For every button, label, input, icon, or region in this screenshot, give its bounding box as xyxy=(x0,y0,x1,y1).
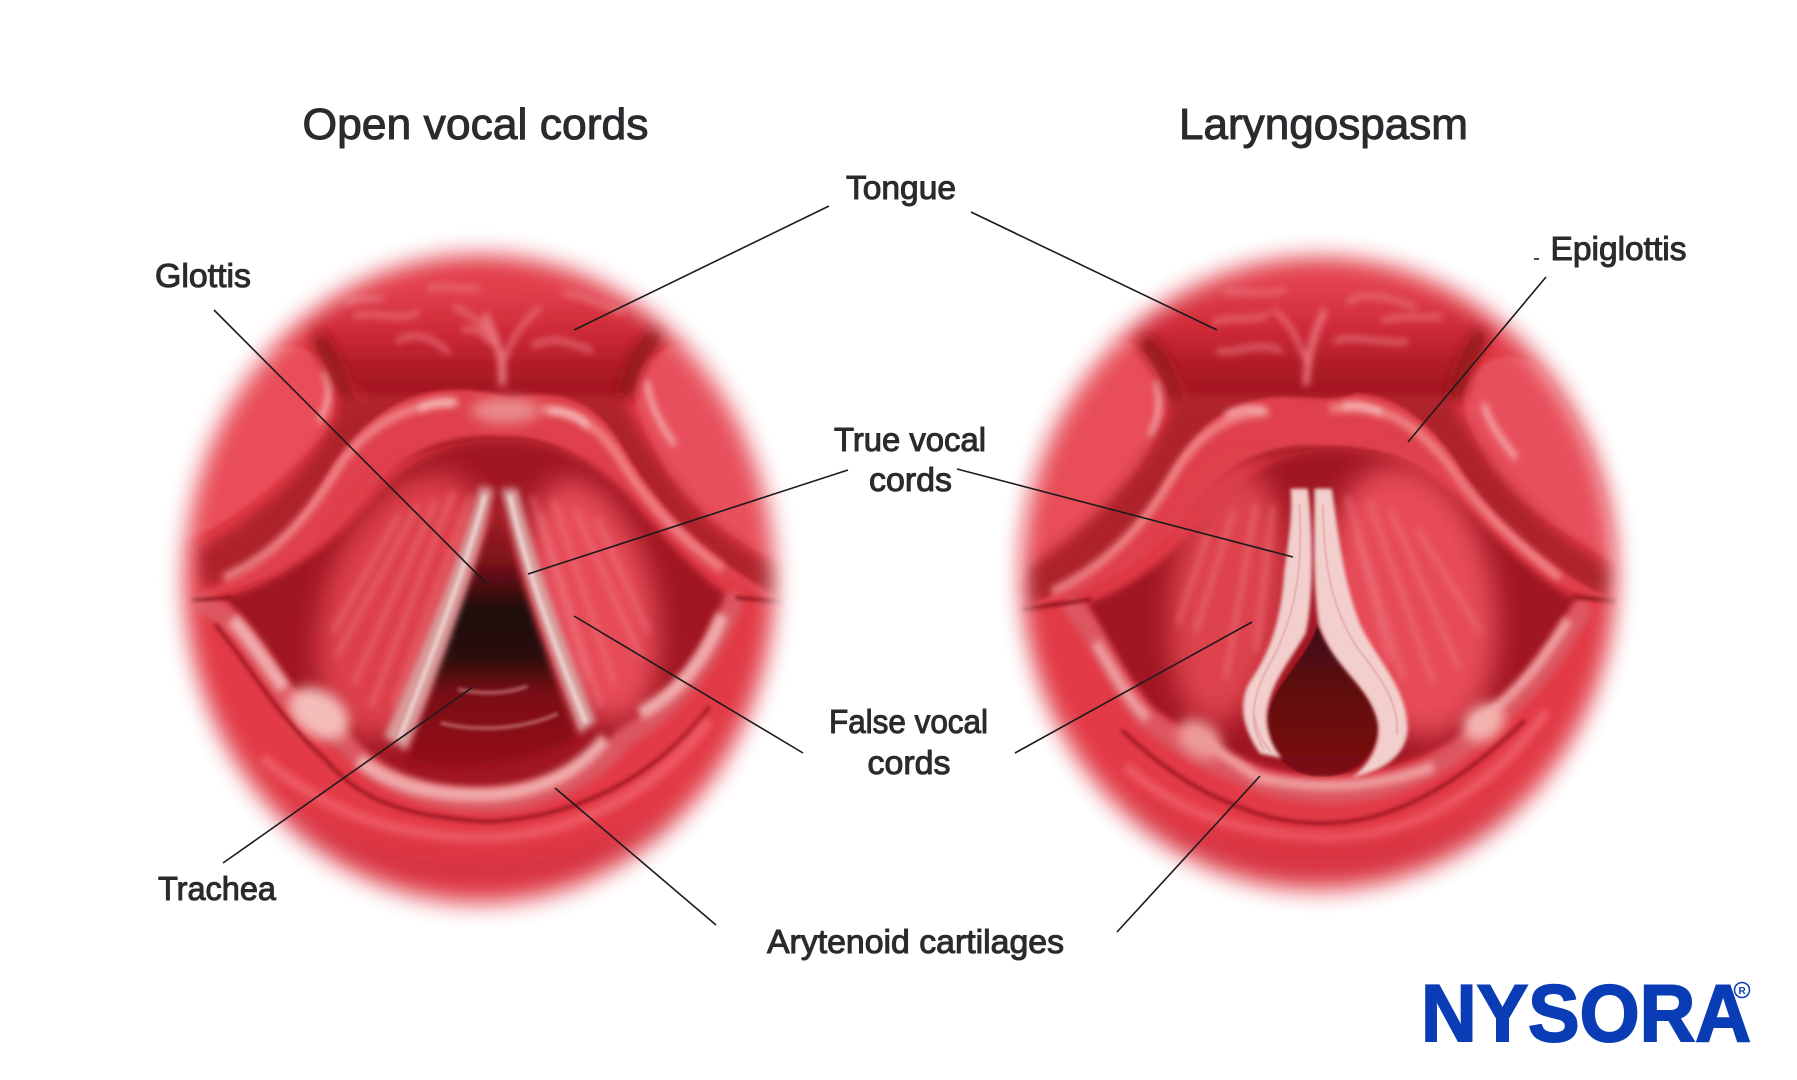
epiglottis highlight xyxy=(224,403,722,578)
true vocal cord left xyxy=(384,486,493,750)
corner pinch left xyxy=(191,597,232,600)
arytenoid nodule left xyxy=(1171,711,1228,767)
base tissue xyxy=(159,230,801,928)
right muscle xyxy=(516,466,672,734)
bottom rim shade xyxy=(280,822,683,870)
lower fold shadow xyxy=(1121,721,1525,823)
label: true vocal cords: cords xyxy=(869,461,952,498)
cord streaks xyxy=(1254,505,1397,753)
illustration: laryngospasm xyxy=(998,234,1640,913)
left muscle xyxy=(1155,461,1300,732)
leader lines xyxy=(214,206,1546,932)
true vocal cord right xyxy=(501,489,596,733)
left side lobe xyxy=(1017,340,1167,583)
line: tongue right xyxy=(971,212,1217,330)
corner pinch right xyxy=(1572,597,1616,601)
line: arytenoid left xyxy=(555,788,716,925)
arytenoid nodule xyxy=(280,677,358,751)
label: true vocal cords: True vocal xyxy=(834,421,986,458)
epiglottis arch xyxy=(193,390,785,602)
lobe highlights xyxy=(319,372,675,445)
tongue side shadows xyxy=(1143,333,1484,406)
left side lobe xyxy=(176,346,335,544)
line: epiglottis xyxy=(1408,277,1546,442)
right side lobe xyxy=(635,346,777,559)
muscle fibres xyxy=(332,491,649,707)
right side lobe xyxy=(1463,356,1616,564)
glottis opening xyxy=(406,505,577,767)
epiglottis bright spots xyxy=(419,402,588,427)
epiglottis highlight xyxy=(1052,408,1559,592)
true vocal cord left xyxy=(1243,489,1312,758)
corner pinch left xyxy=(1022,599,1091,609)
title: laryngospasm: Laryngospasm xyxy=(1179,100,1468,149)
line: tongue left xyxy=(574,206,829,330)
lower rim highlight xyxy=(263,721,709,838)
true vocal cord right xyxy=(1314,489,1408,778)
line: glottis xyxy=(214,310,488,585)
label: trachea: Trachea xyxy=(158,870,277,907)
glottis teardrop xyxy=(1267,624,1378,777)
bottom rim shade xyxy=(1121,812,1520,863)
tracheal rings xyxy=(441,686,558,728)
lobe highlights xyxy=(1150,381,1516,459)
label: glottis: Glottis xyxy=(155,257,251,294)
left muscle xyxy=(304,461,496,750)
cord highlights xyxy=(399,496,586,739)
registered mark xyxy=(1734,982,1750,998)
line: true cords right xyxy=(957,469,1293,557)
corner pinch right xyxy=(735,597,783,602)
illustration: open vocal cords xyxy=(159,230,801,928)
logo: NYSORA: NYSORA xyxy=(1421,969,1751,1059)
logo: NYSORA: R xyxy=(1738,986,1746,997)
title: open vocal cords: Open vocal cords xyxy=(302,100,648,149)
label: epiglottis: Epiglottis xyxy=(1550,230,1686,267)
small dash near epiglottis xyxy=(1534,258,1539,260)
label: false vocal cords: False vocal xyxy=(829,703,988,740)
label: false vocal cords: cords xyxy=(868,744,950,781)
label: true vocal cords xyxy=(834,421,986,498)
shadow under tongue xyxy=(1026,399,1616,606)
epiglottis crest centre xyxy=(471,398,540,423)
laryngeal cavity xyxy=(1087,452,1579,776)
label: tongue: Tongue xyxy=(846,169,956,206)
arytenoid nodule right xyxy=(1457,696,1511,749)
line: false cords right xyxy=(1015,622,1252,753)
lower rim highlight xyxy=(1126,711,1546,838)
tongue xyxy=(307,306,655,404)
arytenoid highlights xyxy=(232,615,722,795)
epiglottis arch xyxy=(1024,394,1614,608)
label: arytenoid cartilages: Arytenoid cartilages xyxy=(767,923,1064,960)
right muscle xyxy=(1304,448,1520,754)
lower fold shadow xyxy=(215,624,709,822)
tongue xyxy=(1126,277,1494,404)
shadow under tongue xyxy=(198,399,783,597)
tongue texture xyxy=(1213,289,1442,385)
base tissue xyxy=(998,234,1640,913)
line: trachea xyxy=(223,687,473,863)
epiglottis bright spots xyxy=(1226,405,1382,415)
tongue texture xyxy=(345,287,623,385)
arytenoid fold xyxy=(1074,608,1581,793)
tongue side shadows xyxy=(317,333,660,406)
arytenoid fold xyxy=(206,601,733,802)
arytenoid highlights xyxy=(1095,620,1568,785)
line: arytenoid right xyxy=(1117,776,1260,932)
label: false vocal cords xyxy=(829,703,988,781)
muscle fibres xyxy=(1178,496,1481,684)
line: false cords left xyxy=(574,616,803,753)
line: true cords left xyxy=(528,470,848,574)
laryngeal cavity xyxy=(224,443,733,790)
